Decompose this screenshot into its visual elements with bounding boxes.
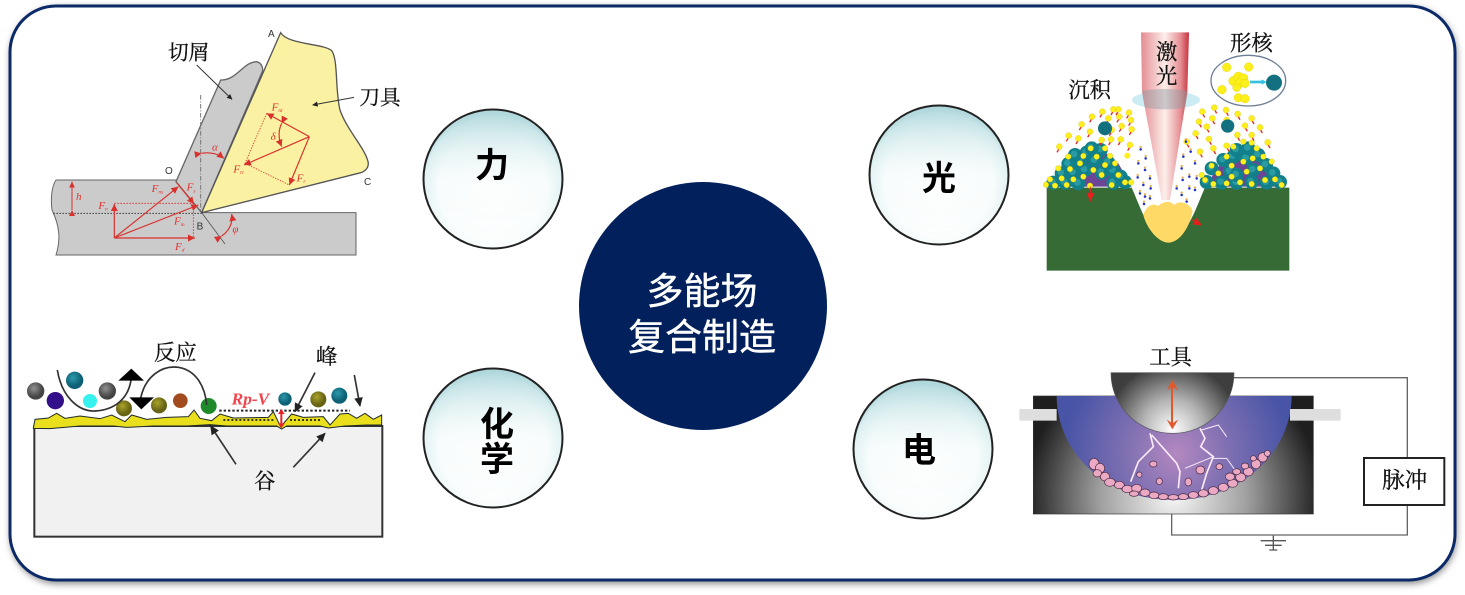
labels: 峰 [316,345,337,369]
pulse box: 脉冲 [1382,468,1427,493]
yellow surface layer [33,410,382,429]
force labels: F [174,215,181,227]
force labels: F [233,163,240,175]
reaction arrows [57,367,360,467]
tool electrode [1111,373,1234,433]
bubble: chemistry [424,368,562,508]
force labels: C [364,177,371,188]
force labels: s [193,188,195,194]
labels: 谷 [254,469,275,493]
label: chip: 切屑 [168,41,209,64]
flying powder [1056,105,1271,159]
center circle: 复合制造 [628,317,776,358]
force labels: ns [158,190,163,196]
substrate with melt pit [1047,188,1289,271]
label: tool [313,88,402,110]
center circle: 多能场 [646,271,758,312]
workpiece block [1033,396,1313,514]
discharge basin [1057,396,1292,500]
laser beam: 激 [1156,40,1177,64]
workpiece [51,180,356,255]
force labels: rt [240,170,244,176]
force labels: F [175,241,182,253]
substrate [34,426,382,537]
force labels: B [197,222,204,233]
force labels: F [98,200,105,212]
panel: cutting force diagram [51,29,402,255]
vapor droplets [1136,138,1198,205]
panel: laser deposition [1043,32,1289,271]
chip [176,62,263,213]
bubble: light [870,106,1008,244]
force labels: δ [271,131,277,143]
label: nucleation: 形核 [1230,32,1273,56]
force labels [76,29,371,254]
force labels: n [105,207,108,213]
particles [27,372,347,416]
bubble: electricity [854,380,992,518]
force labels: F [152,183,158,195]
pulse box [1364,458,1444,505]
label: tool: 刀具 [359,88,402,110]
force vectors [72,113,309,238]
molten pool [1143,202,1193,243]
labels [154,341,337,493]
tool [202,33,368,213]
force labels: t [303,179,305,185]
force labels: F [272,101,278,113]
melt flow arrows [1087,187,1201,225]
ground symbol [1261,536,1286,551]
electrodes [1019,409,1341,421]
mound right [1199,139,1287,190]
bubble: light: 光 [922,160,956,198]
force labels: α [212,142,218,154]
cut plane lines [53,95,225,244]
laser beam [1132,32,1200,200]
bubble: chemistry: 化 [480,406,514,444]
force labels: A [268,29,275,40]
bubble: electricity: 电 [902,432,936,470]
force labels: F [297,172,303,184]
force labels: m [181,222,185,228]
force labels: h [76,191,82,203]
bubble: chemistry: 学 [480,441,514,479]
label: chip [168,41,232,99]
panel: electrical discharge [1019,345,1444,551]
bubble: force [424,110,562,248]
force labels: F [187,182,193,194]
force labels: φ [232,224,238,236]
force labels: nt [278,108,283,114]
nucleation inset [1211,55,1286,106]
black triangles [118,369,154,409]
feed arrow [1167,380,1178,429]
bubble: force: 力 [475,147,509,185]
labels: 反应 [154,341,197,365]
Rp-V dotted level: Rp-V [231,390,271,409]
laser beam: 光 [1156,64,1177,88]
force labels: d [182,248,185,254]
label: tool: 工具 [1149,345,1194,369]
Rp-V dotted level [219,390,350,428]
label: deposition: 沉积 [1068,78,1112,102]
panel: chemical reaction surface [27,341,382,537]
lightning [1131,425,1235,490]
force labels: O [165,166,173,177]
center circle [579,182,827,430]
debris grains [1089,450,1270,500]
circuit wires [1172,378,1407,535]
mound left [1043,141,1134,190]
